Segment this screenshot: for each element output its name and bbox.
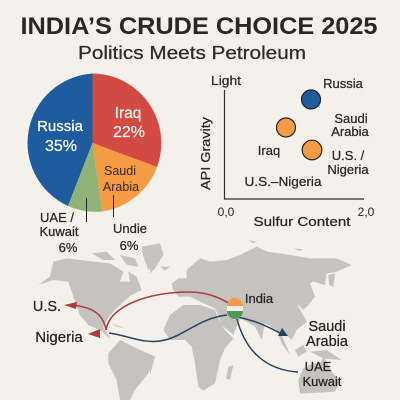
label: U.S.–Nigeria: U.S.–Nigeria: [244, 174, 322, 189]
route: red arcs: [72, 292, 238, 330]
axes: [224, 90, 364, 199]
point: Iraq: [276, 118, 296, 137]
axis label: Sulfur Content: Sulfur Content: [254, 215, 351, 229]
label: Iraq: Iraq: [258, 143, 280, 158]
label: Saudi Arabia: Arabia: [306, 334, 349, 350]
slice: Russia: [28, 74, 92, 206]
map: Americas: [38, 243, 170, 400]
label: Iraq 22%: 22%: [113, 124, 145, 141]
leader line: UAE: [86, 195, 114, 222]
pie chart: [28, 74, 161, 212]
route: blue arcs: [109, 315, 298, 372]
label: Iraq 22%: Iraq: [115, 105, 141, 122]
label: Russia 35%: 35%: [45, 138, 77, 155]
icon: India flag marker: [227, 298, 243, 319]
map: Eurasia, Africa, Australia: [150, 240, 352, 394]
label: UAE / Kuwait 6%: 6%: [59, 240, 78, 255]
subtitle: Politics Meets Petroleum: [78, 43, 306, 63]
label: U.S. / Nigeria: U.S. /: [332, 148, 365, 163]
point: Russia: [302, 90, 320, 109]
label: UAE Kuwait: UAE: [305, 359, 332, 374]
label: Saudi Arabia: Saudi: [334, 111, 368, 126]
label: U.S. / Nigeria: Nigeria: [327, 162, 369, 177]
title: INDIA’S CRUDE CHOICE 2025: [20, 13, 378, 40]
label: Russia 35%: Russia: [37, 118, 84, 135]
label: India: India: [245, 291, 274, 306]
label: U.S.: U.S.: [33, 299, 61, 315]
arrowhead: U.S.: [64, 302, 77, 309]
label: Saudi Arabia: Arabia: [103, 180, 139, 194]
axis label: API Gravity: API Gravity: [199, 116, 213, 190]
axis label: Light: Light: [211, 74, 242, 88]
arrowhead: Saudi Arabia route: [278, 328, 288, 336]
arrowhead: Nigeria: [88, 329, 100, 338]
label: Russia: Russia: [323, 76, 364, 91]
slice: Saudi Arabia: [92, 143, 157, 212]
label: Undie 6%: 6%: [120, 238, 139, 253]
label: Saudi Arabia: Arabia: [331, 124, 370, 139]
label: UAE / Kuwait 6%: Kuwait: [39, 224, 79, 239]
point: U.S. / Nigeria: [302, 140, 322, 160]
label: Nigeria: Nigeria: [35, 329, 83, 346]
tick: 2,0: 2,0: [358, 205, 375, 219]
tick: 0,0: 0,0: [218, 205, 235, 219]
label: Saudi Arabia: Saudi: [308, 319, 346, 335]
label: UAE / Kuwait 6%: UAE /: [40, 210, 74, 225]
label: Undie 6%: Undie: [113, 221, 147, 236]
slice: UAE / Kuwait: [68, 143, 102, 212]
label: UAE Kuwait: Kuwait: [302, 374, 342, 389]
label: Saudi Arabia: Saudi: [104, 164, 136, 178]
slice: Iraq: [92, 74, 161, 167]
scatter plot: [199, 74, 375, 229]
world map: [38, 240, 352, 400]
